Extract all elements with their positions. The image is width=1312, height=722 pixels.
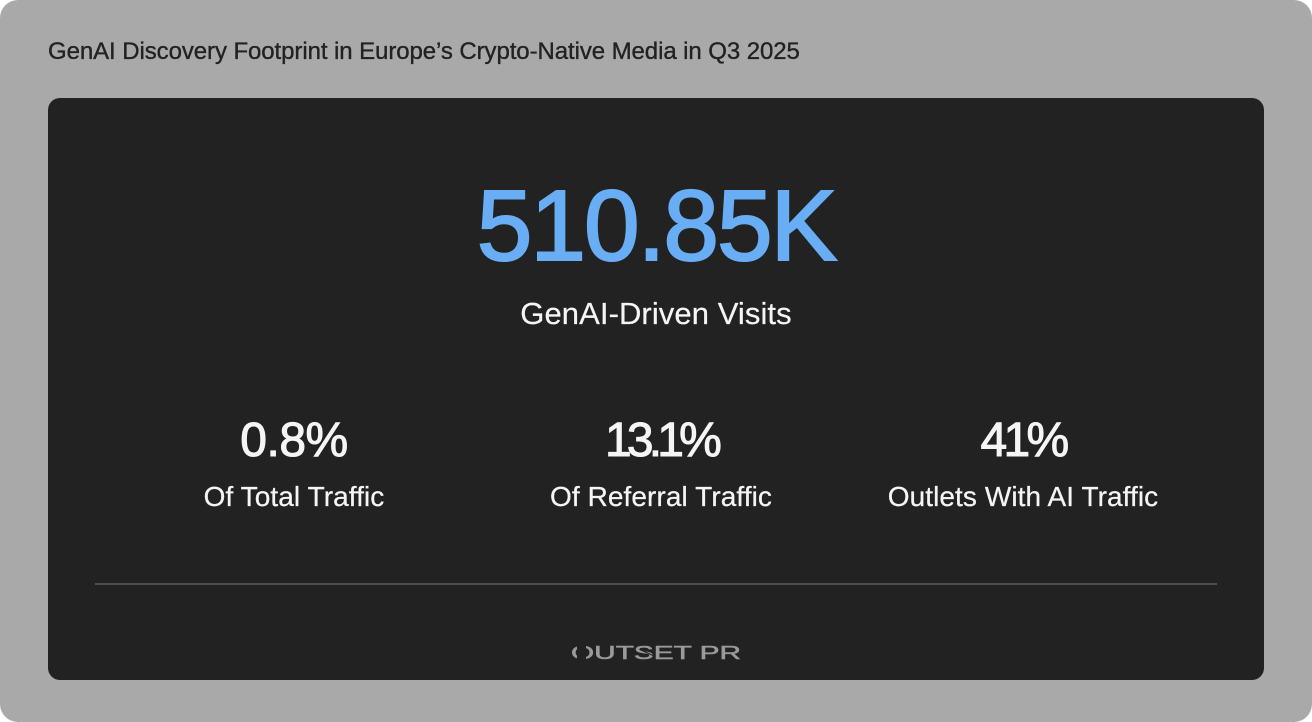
stat value: 13.1%: [605, 414, 717, 467]
headline label: GenAI-Driven Visits: [520, 296, 792, 331]
stat: total traffic: [204, 414, 384, 512]
stat: outlets with AI traffic: [888, 414, 1158, 512]
panel: dark metrics: [48, 98, 1264, 680]
logo: Outset PR: OUTSET PR: [571, 643, 741, 663]
stat label: Outlets With AI Traffic: [888, 481, 1158, 512]
stat value: 0.8%: [240, 414, 348, 467]
logo: Outset PR: [571, 643, 741, 663]
headline number: 510.85K: [477, 170, 835, 282]
stat: referral traffic: [550, 414, 772, 512]
stat label: Of Referral Traffic: [550, 481, 772, 512]
stat label: Of Total Traffic: [204, 481, 384, 512]
title: GenAI Discovery Footprint in Europe’s Crypto-Native Media in Q3 2025: [48, 38, 800, 65]
stat value: 41%: [980, 414, 1065, 467]
